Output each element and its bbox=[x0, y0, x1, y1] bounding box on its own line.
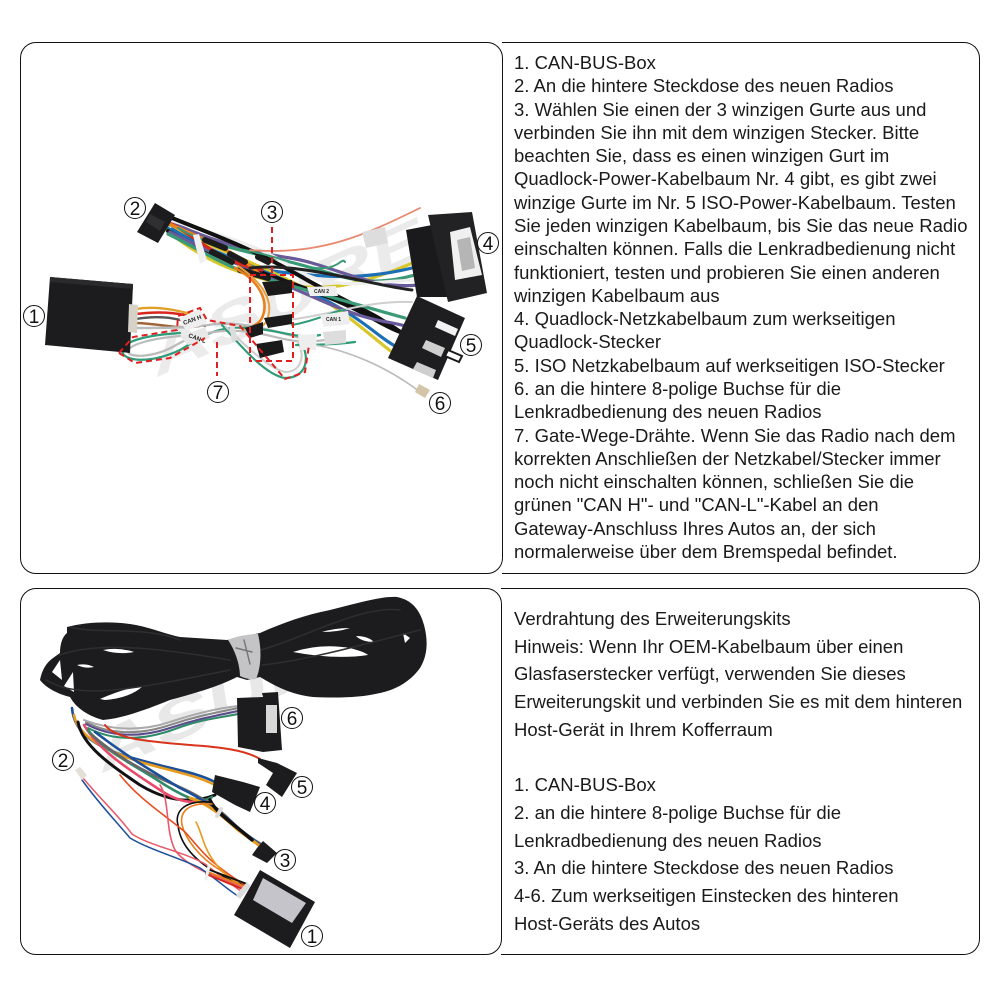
text block: top harness legend: Lenkradbedienung des neuen Radios bbox=[514, 401, 822, 422]
text block: top harness legend: korrekten Anschließen der Netzkabel/Stecker immer bbox=[514, 448, 941, 469]
component: connector 4 bbox=[212, 775, 260, 812]
marker: top 5: 5 bbox=[466, 336, 476, 357]
text block: top harness legend: 5. ISO Netzkabelbaum auf werkseitigen ISO-Stecker bbox=[514, 355, 945, 376]
marker: bottom 3: 3 bbox=[280, 851, 290, 872]
text block: bottom extension kit legend: 1. CAN-BUS-Box bbox=[514, 774, 656, 795]
wires: heat-shrink sleeves near connector 2 bbox=[205, 240, 268, 278]
tiny plugs bbox=[245, 280, 292, 358]
text block: top harness legend: beachten Sie, dass es einen winzigen Gurt im bbox=[514, 145, 889, 166]
wires: bundle from connector 2 to connectors 4 and 5 bbox=[165, 218, 420, 352]
labels: CAN H, CAN L and wire tags: CAN 1 bbox=[326, 317, 341, 323]
marker: top 3: 3 bbox=[267, 203, 277, 224]
marker: bottom 1 bbox=[302, 926, 322, 948]
text block: bottom extension kit legend: Erweiterungskit und verbinden Sie es mit dem hinteren bbox=[514, 691, 962, 712]
text block: top harness legend: einschalten können. Falls die Lenkradbedienung nicht bbox=[514, 238, 955, 259]
marker: top 1 bbox=[24, 306, 44, 328]
watermark: top photo: ASURE bbox=[147, 203, 430, 391]
marker: bottom 2: 2 bbox=[58, 751, 68, 772]
silver tape band bbox=[228, 634, 260, 679]
marker: top 4: 4 bbox=[483, 234, 494, 255]
panel: bottom extension kit photo bbox=[20, 588, 502, 955]
wires: green and white CAN loop bbox=[122, 325, 355, 378]
component: connector 5 bbox=[258, 758, 297, 797]
component: connector 6 bbox=[237, 692, 282, 752]
marker: bottom 6 bbox=[282, 708, 302, 730]
text block: bottom extension kit legend bbox=[514, 608, 962, 934]
watermark: bottom photo: ASURE bbox=[92, 600, 384, 787]
callout: dashed box for item 3 bbox=[250, 227, 293, 361]
component: extension CAN-BUS box bbox=[234, 870, 315, 948]
text block: top harness legend: 7. Gate-Wege-Drähte. Wenn Sie das Radio nach dem bbox=[514, 424, 956, 446]
text block: top harness legend: Gateway-Anschluss Ihres Autos an, der sich bbox=[514, 518, 876, 539]
labels: CAN H, CAN L and wire tags bbox=[179, 227, 388, 350]
marker: bottom 6: 6 bbox=[287, 709, 297, 730]
text block: top harness legend: grünen "CAN H"- und "CAN-L"-Kabel an den bbox=[514, 494, 879, 515]
marker: top 7: 7 bbox=[213, 383, 223, 404]
text block: top harness legend: winzige Gurte im Nr. 5 ISO-Power-Kabelbaum. Testen bbox=[514, 192, 956, 213]
panel: top harness photo bbox=[20, 42, 503, 574]
text block: bottom extension kit legend: 2. an die hintere 8-polige Buchse für die bbox=[514, 802, 841, 823]
text block: top harness legend: verbinden Sie ihn mit dem winzigen Stecker. Bitte bbox=[514, 122, 919, 143]
text block: bottom extension kit legend: Lenkradbedienung des neuen Radios bbox=[514, 830, 822, 850]
text block: top harness legend: funktioniert, testen und probieren Sie einen anderen bbox=[514, 262, 940, 283]
marker: bottom 1: 1 bbox=[307, 927, 317, 948]
marker: top 6 bbox=[430, 392, 450, 415]
cable coil bbox=[40, 597, 427, 720]
text block: top harness legend: Sie jeden winzigen Kabelbaum, bis Sie das neue Radio bbox=[514, 215, 968, 236]
marker: bottom 2 bbox=[52, 750, 74, 772]
text block: top harness legend: normalerweise über dem Bremspedal befindet. bbox=[514, 541, 898, 562]
labels: CAN H, CAN L and wire tags: CAN L bbox=[187, 333, 207, 345]
wire: white wire to plug 6 bbox=[315, 345, 420, 392]
component: plug 2 bbox=[75, 767, 87, 780]
text block: top harness legend: winzigen Kabelbaum aus bbox=[514, 285, 720, 306]
component: plug 6 bbox=[415, 384, 430, 398]
wires to connectors 3 and 4 bbox=[72, 708, 262, 846]
illustration: main wiring harness bbox=[45, 203, 487, 398]
component: connector 5 bbox=[388, 296, 465, 380]
marker: top 5 bbox=[460, 334, 482, 357]
wires: box to can wires bbox=[136, 308, 300, 338]
marker: bottom 5 bbox=[292, 776, 312, 799]
marker: bottom 4: 4 bbox=[260, 794, 271, 815]
text block: top harness legend: noch nicht einschalten können, schließen Sie die bbox=[514, 471, 914, 492]
labels: CAN H, CAN L and wire tags: CAN 2 bbox=[314, 289, 329, 295]
text block: bottom extension kit legend: 4-6. Zum werkseitigen Einstecken des hinteren bbox=[514, 885, 899, 906]
wires to connector 6 bbox=[84, 706, 238, 738]
wires: orange tiny harness bbox=[235, 268, 264, 328]
text block: bottom extension kit legend: Host-Geräts des Autos bbox=[514, 913, 700, 934]
text block: top harness legend: Quadlock-Stecker bbox=[514, 331, 661, 352]
component: connector 4 bbox=[406, 212, 487, 302]
text block: top harness legend: Quadlock-Power-Kabelbaum Nr. 4 gibt, es gibt zwei bbox=[514, 168, 937, 189]
text block: bottom extension kit legend: Verdrahtung des Erweiterungskits bbox=[514, 608, 791, 629]
marker: top 1: 1 bbox=[29, 307, 39, 328]
marker: top 3 bbox=[262, 202, 282, 224]
marker: top 7 bbox=[208, 382, 228, 404]
text block: bottom extension kit legend: 3. An die hintere Steckdose des neuen Radios bbox=[514, 857, 894, 878]
marker: bottom 3 bbox=[274, 850, 296, 872]
text block: top harness legend: 1. CAN-BUS-Box bbox=[514, 52, 656, 73]
panel: top description bbox=[502, 42, 980, 574]
illustration: extension kit harness bbox=[40, 597, 427, 948]
orange and red loops to box bbox=[120, 775, 245, 888]
component: connector 2 bbox=[137, 203, 175, 243]
panel: bottom description bbox=[501, 588, 980, 955]
text block: bottom extension kit legend: Glasfaserstecker verfügt, verwenden Sie dieses bbox=[514, 663, 906, 684]
text block: top harness legend: 4. Quadlock-Netzkabelbaum zum werkseitigen bbox=[514, 308, 895, 329]
text block: bottom extension kit legend: Hinweis: Wenn Ihr OEM-Kabelbaum über einen bbox=[514, 636, 903, 657]
component: CAN-BUS box bbox=[45, 277, 138, 353]
text block: top harness legend: 2. An die hintere Steckdose des neuen Radios bbox=[514, 75, 894, 96]
wire: thin salmon antenna lead bbox=[250, 208, 420, 251]
cable tie near the box bbox=[206, 866, 209, 879]
red wire to connector 5 bbox=[105, 725, 260, 759]
marker: top 6: 6 bbox=[435, 394, 445, 415]
marker: bottom 4 bbox=[254, 792, 276, 815]
text block: top harness legend: 3. Wählen Sie einen der 3 winzigen Gurte aus und bbox=[514, 99, 926, 120]
text block: bottom extension kit legend: Host-Gerät in Ihrem Kofferraum bbox=[514, 719, 773, 740]
text block: top harness legend bbox=[514, 52, 968, 562]
component: connector 3 bbox=[252, 841, 277, 863]
marker: bottom 5: 5 bbox=[297, 778, 307, 799]
labels: CAN H, CAN L and wire tags: CAN H bbox=[183, 315, 203, 327]
cable tie near the orange loop bbox=[217, 809, 221, 816]
wire bundle at the box bbox=[206, 870, 247, 890]
marker: top 4 bbox=[478, 232, 498, 255]
wires from box to plug 2 bbox=[82, 778, 242, 896]
text block: top harness legend: 6. an die hintere 8-polige Buchse für die bbox=[514, 378, 841, 399]
callout: dashed outline for item 7 bbox=[119, 308, 309, 379]
marker: top 2: 2 bbox=[130, 199, 140, 220]
marker: top 2 bbox=[124, 198, 146, 220]
